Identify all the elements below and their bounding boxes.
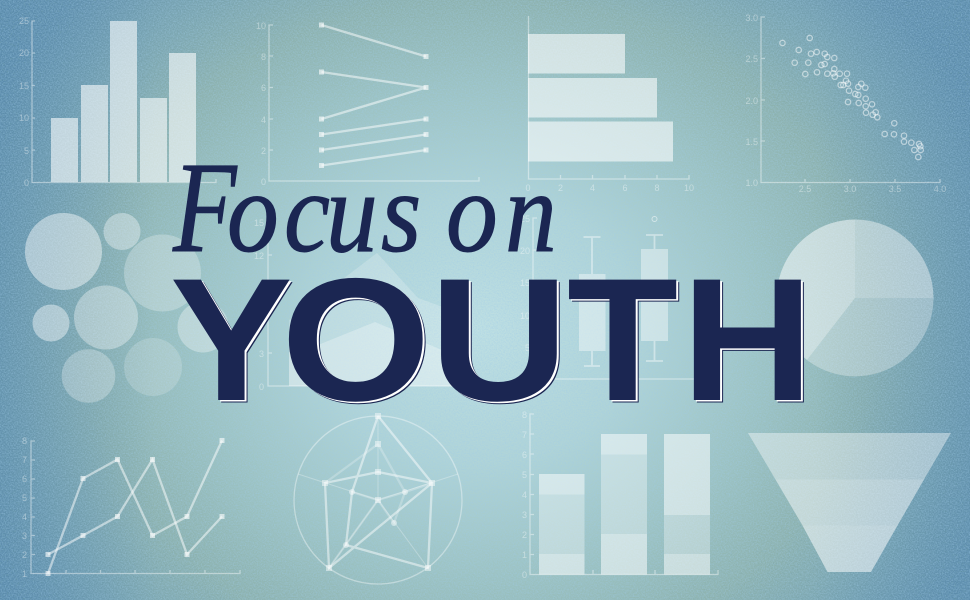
scatter plot: top right: 2.0 [745,96,758,106]
title: YOUTH: Y [172,244,295,440]
area chart: middle centre-left: 12 [254,251,264,261]
slope line chart: top centre-left: 8 [261,52,266,62]
pie chart: middle right [777,220,934,376]
stacked bar chart: bottom centre-right: 8 [522,410,527,420]
title: YOUTH: O [284,244,434,440]
stacked bar chart: bottom centre-right: 2 [522,530,527,540]
slope line chart: top centre-left: 2 [261,146,266,156]
funnel chart: bottom right [748,433,951,572]
scatter plot: top right: 1.0 [745,178,758,188]
title: Focus on: n [505,149,557,276]
stacked bar chart: bottom centre-right: 5 [522,470,527,480]
stacked bar chart: bottom centre-right: 7 [522,430,527,440]
title: YOUTH: O [283,243,433,439]
bar chart: top left: 25 [19,16,29,26]
title: YOUTH: Y [170,243,293,438]
box plot: middle centre-right: 25 [520,214,530,224]
horizontal bar chart: top centre-right: 0 [525,183,531,193]
stacked bar chart: bottom centre-right: 4 [522,490,527,500]
bar chart: top left: 0 [24,178,29,188]
title: Focus on: c [284,149,330,276]
title: YOUTH: O [281,241,431,437]
horizontal bar chart: top centre-right: 4 [590,183,595,193]
horizontal bar chart: top centre-right: 6 [622,183,628,193]
title: Focus on: o [446,149,498,276]
line chart: bottom left: 3 [22,531,27,541]
title: YOUTH: U [432,243,571,439]
box plot: middle centre-right: 5 [525,343,530,353]
stacked bar chart: bottom centre-right: 1 [522,550,527,560]
title: YOUTH: T [569,243,680,439]
slope line chart: top centre-left: 10 [256,21,266,31]
scatter plot: top right: 3.0 [745,13,758,23]
bar chart: top left: 20 [19,48,29,58]
stacked bar chart: bottom centre-right: 6 [522,450,527,460]
bar chart: top left: 5 [24,146,29,156]
scatter plot: top right: 2.5 [745,54,758,64]
title: Focus on [172,136,557,280]
horizontal bar chart: top centre-right: 10 [684,183,694,193]
slope line chart: top centre-left: 4 [261,115,266,125]
area chart: middle centre-left: 15 [254,218,264,228]
scatter plot: top right [745,13,946,194]
line chart: bottom left: 2 [22,550,27,560]
title: YOUTH: U [432,244,572,440]
stacked bar chart: bottom centre-right: 3 [522,510,527,520]
area chart: middle centre-left [254,218,480,392]
horizontal bar chart: top centre-right: 8 [654,183,660,193]
line chart: bottom left: 6 [22,474,27,484]
line chart: bottom left: 5 [22,493,27,503]
scatter plot: top right: 4.0 [934,184,946,194]
line chart: bottom left: 8 [22,436,27,446]
radar chart: bottom centre [294,413,462,584]
box plot: middle centre-right: 15 [520,278,530,288]
bar chart: top left: 15 [19,81,29,91]
scatter plot: top right: 3.0 [844,184,856,194]
scatter plot: top right: 1.5 [745,137,758,147]
title: YOUTH: H [685,244,816,440]
title: YOUTH: H [684,243,815,439]
area chart: middle centre-left: 3 [259,349,264,359]
line chart: bottom left [22,436,240,579]
slope line chart: top centre-left: 0 [261,177,266,187]
bar chart: top left: 10 [19,113,29,123]
scatter plot: top right: 3.5 [889,184,901,194]
box plot: middle centre-right [520,214,702,379]
scatter plot: top right: 2.5 [799,184,811,194]
line chart: bottom left: 4 [22,512,27,522]
slope line chart: top centre-left: 6 [261,83,266,93]
title: Focus on: s [381,149,421,276]
area chart: middle centre-left: 0 [259,382,264,392]
title: YOUTH [170,241,816,441]
stacked bar chart: bottom centre-right [522,410,718,580]
title: Focus on: o [227,149,279,276]
title: YOUTH: T [570,244,681,440]
title: YOUTH: U [430,241,569,437]
title: YOUTH: Y [173,245,296,441]
title: Focus on: u [326,149,378,276]
title: YOUTH: T [567,241,678,437]
box plot: middle centre-right: 10 [520,311,530,321]
slope line chart: top centre-left [256,21,479,187]
box plot: middle centre-right: 20 [520,246,530,256]
line chart: bottom left: 7 [22,455,27,465]
title: YOUTH: H [682,241,813,437]
line chart: bottom left: 1 [22,569,27,579]
title: Focus on: F [172,136,237,280]
horizontal bar chart: top centre-right: 2 [558,183,563,193]
horizontal bar chart: top centre-right [525,16,694,193]
bar chart: top left [19,16,216,188]
bubble chart: middle left [25,213,228,403]
stacked bar chart: bottom centre-right: 0 [522,570,527,580]
